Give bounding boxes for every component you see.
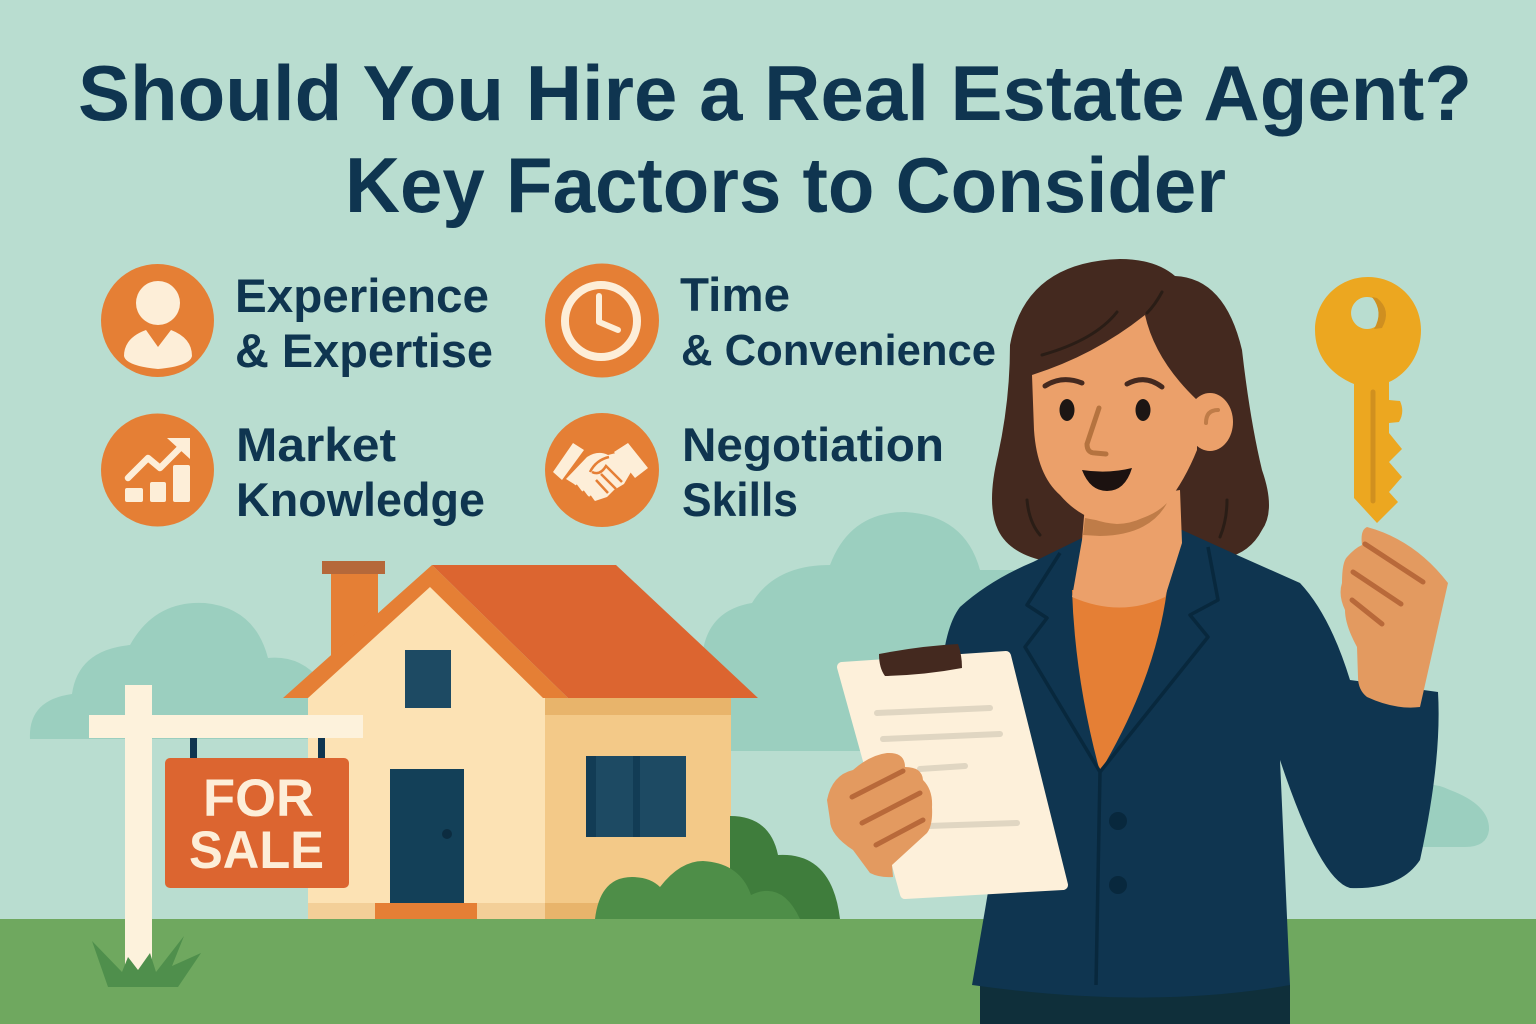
factor: market knowledge bbox=[101, 414, 485, 526]
bush bbox=[595, 816, 840, 919]
chin shadow bbox=[1083, 503, 1167, 536]
sign text: SALE bbox=[189, 821, 324, 880]
blazer bbox=[945, 530, 1439, 998]
factor: experience and expertise: Experience bbox=[235, 269, 489, 322]
factor: negotiation skills bbox=[545, 413, 944, 527]
house side wall bbox=[545, 698, 731, 919]
for sale sign bbox=[89, 685, 363, 987]
right hand bbox=[1341, 527, 1448, 708]
hair strands bbox=[1027, 292, 1227, 537]
post bbox=[125, 685, 152, 970]
icon: rising chart bbox=[101, 414, 214, 526]
icon: person bbox=[101, 264, 214, 377]
agent bbox=[827, 259, 1448, 1024]
title: Key Factors to Consider bbox=[345, 141, 1226, 229]
eyes bbox=[1060, 399, 1150, 421]
ear bbox=[1187, 393, 1233, 451]
cloud: left bbox=[30, 603, 320, 739]
chimney bbox=[322, 561, 385, 663]
sign text: FOR bbox=[203, 769, 314, 828]
grass tuft bbox=[92, 936, 201, 987]
mouth bbox=[1082, 468, 1132, 491]
lapels bbox=[1025, 547, 1218, 985]
nose bbox=[1087, 408, 1106, 454]
sign text bbox=[189, 769, 324, 880]
icon: key bbox=[1315, 277, 1421, 523]
brows bbox=[1045, 380, 1162, 387]
crossbar bbox=[89, 715, 363, 738]
factor: negotiation skills: Negotiation bbox=[682, 418, 944, 471]
cloud: right bbox=[1380, 784, 1489, 847]
icon: handshake bbox=[545, 413, 659, 527]
trousers bbox=[980, 985, 1290, 1024]
left hand bbox=[827, 753, 932, 877]
icon: clock bbox=[545, 264, 659, 378]
factor: negotiation skills: Skills bbox=[682, 473, 798, 526]
blouse bbox=[1072, 590, 1167, 772]
title bbox=[78, 49, 1472, 229]
neck bbox=[1072, 490, 1182, 608]
face bbox=[1032, 315, 1197, 524]
factor: time and convenience: & Convenience bbox=[681, 326, 996, 375]
hair bbox=[992, 259, 1269, 562]
house bbox=[283, 561, 758, 919]
factor: market knowledge: Knowledge bbox=[236, 473, 485, 526]
sign board bbox=[165, 758, 349, 888]
roof bbox=[432, 565, 758, 698]
factor: market knowledge: Market bbox=[236, 418, 396, 471]
side window bbox=[586, 756, 686, 837]
factor: experience and expertise: & Expertise bbox=[235, 324, 493, 377]
blazer button bbox=[1109, 812, 1127, 894]
attic window bbox=[405, 650, 451, 708]
clipboard bbox=[842, 644, 1063, 894]
factor: time and convenience: Time bbox=[680, 268, 790, 321]
factor: time and convenience bbox=[545, 264, 996, 378]
door bbox=[375, 769, 477, 919]
title: Should You Hire a Real Estate Agent? bbox=[78, 49, 1472, 137]
factor: experience and expertise bbox=[101, 264, 493, 377]
ground bbox=[0, 919, 1536, 1024]
house front wall bbox=[308, 585, 545, 919]
cloud: behind agent bbox=[703, 512, 1050, 751]
